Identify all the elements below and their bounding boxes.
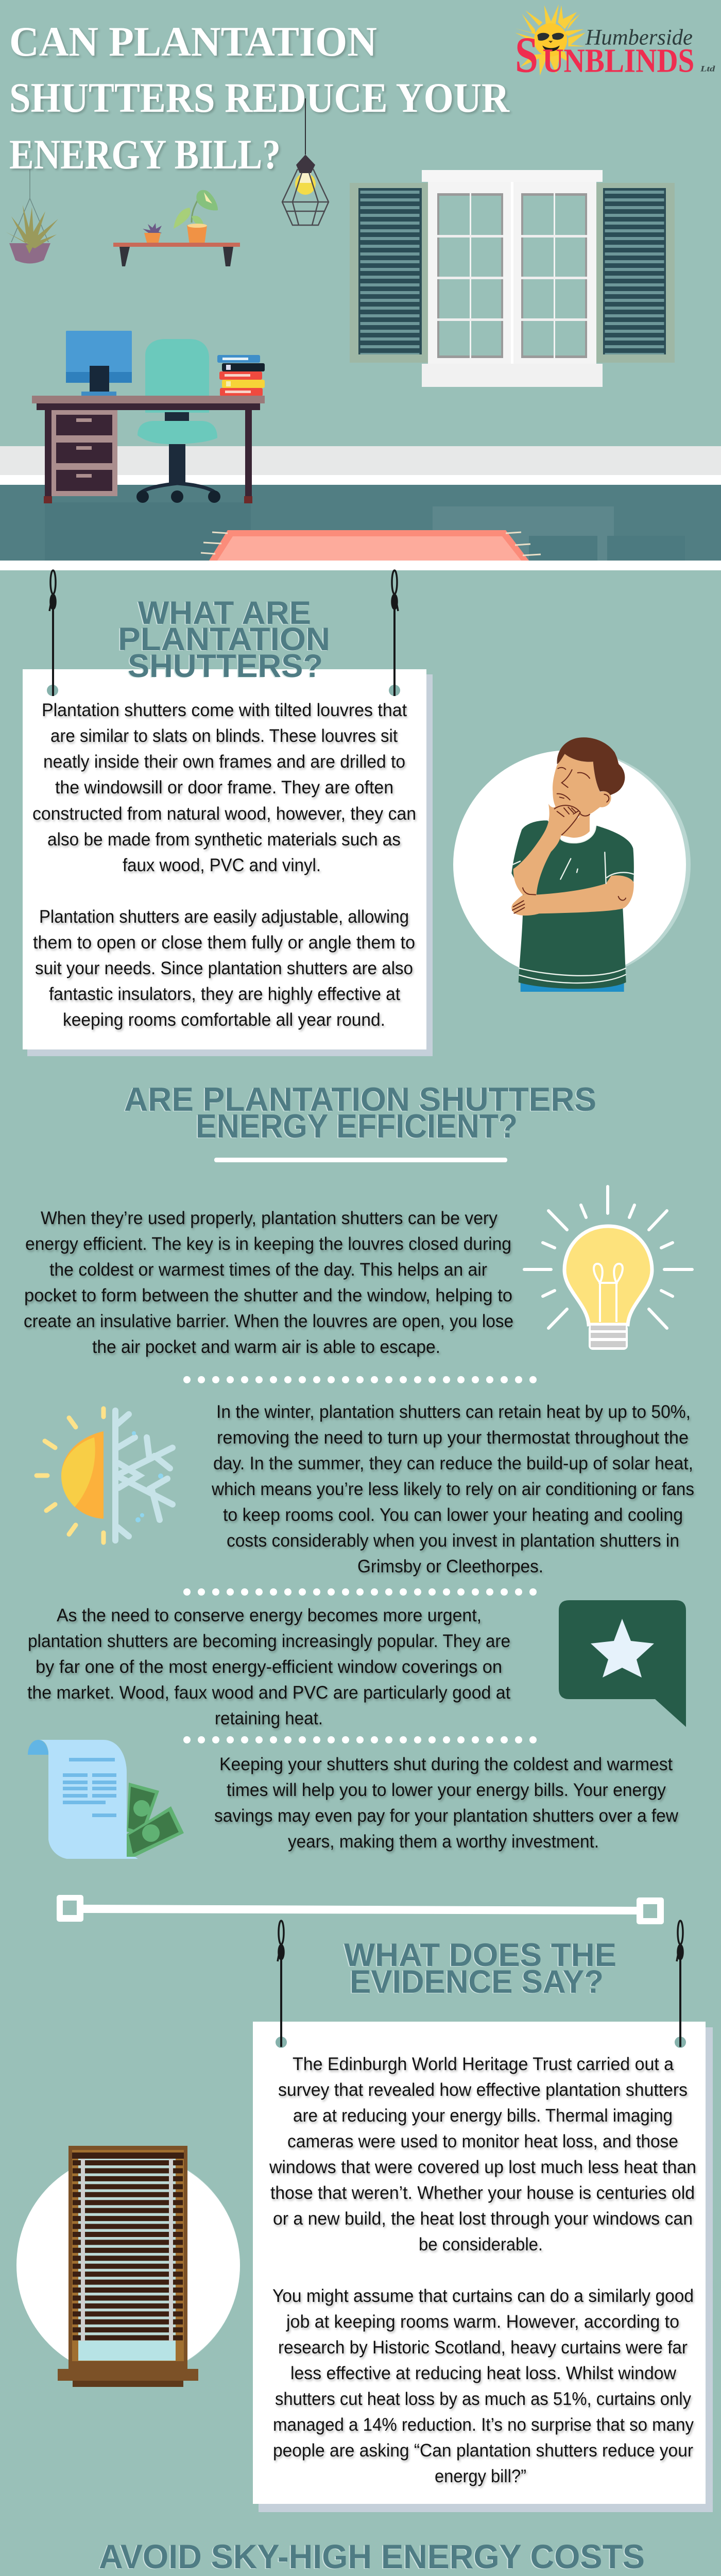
text: what are plantation shutters: Plantation shutters come with tilted louvres that — [42, 700, 407, 720]
divider dots — [187, 1736, 534, 1743]
icon: light bulb — [524, 1187, 692, 1350]
text: energy efficient intro: When they’re used properly, plantation shutters can be very — [41, 1208, 497, 1228]
text: what are plantation shutters: constructed from natural wood, however, they can — [32, 804, 416, 824]
text: what are plantation shutters: them to open or close them fully or angle them to — [33, 933, 415, 953]
logo: Humberside Sunblinds: Humberside — [585, 25, 693, 50]
rope right — [392, 570, 398, 696]
text: popularity of shutters: retaining heat. — [215, 1708, 323, 1728]
text: energy efficient intro: the air pocket and warm air is able to escape. — [92, 1337, 440, 1357]
text: what are plantation shutters: keeping rooms comfortable all year round. — [63, 1010, 385, 1030]
text: popularity of shutters — [27, 1605, 510, 1728]
text: evidence: You might assume that curtains can do a similarly good — [272, 2286, 694, 2306]
text: what are plantation shutters: suit your needs. Since plantation shutters are also — [35, 958, 413, 978]
heading: what are plantation shutters: SHUTTERS? — [128, 648, 323, 684]
rug — [201, 530, 541, 561]
text: energy efficient intro: the coldest or warmest times of the day. This helps an air — [49, 1260, 487, 1280]
heading: are plantation shutters energy efficient: ARE PLANTATION SHUTTERS — [124, 1080, 596, 1118]
text: evidence: cameras were used to monitor heat loss, and those — [287, 2131, 678, 2151]
text: winter and summer savings: day. In the summer, they can reduce the build-up of solar heat, — [213, 1453, 693, 1473]
text: popularity of shutters: the market. Wood, faux wood and PVC are particularly good at — [27, 1683, 510, 1703]
heading: avoid sky-high energy costs: AVOID SKY-HIGH ENERGY COSTS — [99, 2537, 645, 2575]
text: evidence: The Edinburgh World Heritage Trust carried out a — [293, 2054, 674, 2074]
text: winter and summer savings: In the winter, plantation shutters can retain heat by up to 50%, — [216, 1402, 691, 1422]
text: what are plantation shutters: also be made from synthetic materials such as — [47, 829, 401, 850]
icon: hanging plant — [6, 170, 58, 264]
divider dots — [187, 1588, 534, 1596]
text: what are plantation shutters: fantastic insulators, they are highly effective at — [49, 984, 400, 1004]
text: what are plantation shutters — [32, 700, 416, 1030]
text: lower your bills: times will help you to lower your energy bills. Your energy — [227, 1780, 666, 1800]
text: what are plantation shutters: Plantation shutters are easily adjustable, allowing — [39, 907, 409, 927]
title: ENERGY BILL? — [9, 131, 281, 178]
panel: what does the evidence say — [253, 1921, 713, 2512]
text: energy efficient intro: energy efficient. The key is in keeping the louvres closed during — [25, 1234, 511, 1254]
text: lower your bills: Keeping your shutters shut during the coldest and warmest — [219, 1754, 673, 1774]
text: evidence — [269, 2054, 696, 2486]
heading: what are plantation shutters: PLANTATION — [118, 621, 330, 657]
text: winter and summer savings: Grimsby or Cleethorpes. — [357, 1556, 543, 1577]
title: SHUTTERS REDUCE YOUR — [9, 74, 510, 121]
hero room scene — [0, 446, 721, 570]
logo: Humberside Sunblinds: Ltd — [700, 65, 716, 74]
heading: are plantation shutters energy efficient — [124, 1080, 596, 1145]
text: evidence: are at reducing your energy bills. Thermal imaging — [293, 2106, 673, 2126]
text: lower your bills — [214, 1754, 679, 1852]
text: evidence: or a new build, the heat lost through your windows can — [273, 2209, 693, 2229]
icon: thinking man — [453, 737, 691, 992]
text: energy efficient intro: create an insulative barrier. When the louvres are open, you lose — [24, 1311, 513, 1331]
text: popularity of shutters: As the need to conserve energy becomes more urgent, — [57, 1605, 482, 1625]
icon: shuttered window — [350, 170, 675, 387]
text: winter and summer savings: to keep rooms cool. You can lower your heating and cooling — [223, 1505, 683, 1525]
text: winter and summer savings: removing the need to turn up your thermostat throughout the — [217, 1428, 689, 1448]
books — [217, 355, 265, 396]
heading: what are plantation shutters: WHAT ARE — [138, 595, 311, 631]
panel: what are plantation shutters — [23, 570, 433, 1056]
rope left — [49, 570, 56, 696]
text: evidence: job at keeping rooms warm. However, according to — [286, 2312, 679, 2332]
text: winter and summer savings: which means you’re less likely to rely on air conditioning or fans — [211, 1479, 694, 1499]
icon: half sun half snowflake — [37, 1409, 173, 1543]
title — [9, 18, 510, 178]
logo: Humberside Sunblinds — [515, 4, 716, 83]
heading: what does the evidence say: EVIDENCE SAY? — [350, 1964, 604, 2000]
text: what are plantation shutters: are similar to slats on blinds. These louvres sit — [50, 726, 398, 746]
icon: desk with monitor, chair and books — [32, 331, 265, 503]
text: what are plantation shutters: faux wood, PVC and vinyl. — [123, 855, 321, 875]
heading: what are plantation shutters — [118, 595, 330, 684]
text: winter and summer savings — [211, 1402, 694, 1577]
divider dots — [187, 1376, 534, 1383]
text: what are plantation shutters: neatly inside their own frames and are drilled to — [43, 752, 405, 772]
text: evidence: people are asking “Can plantation shutters reduce your — [273, 2441, 693, 2461]
text: lower your bills: years, making them a worthy investment. — [288, 1832, 599, 1852]
text: evidence: survey that revealed how effective plantation shutters — [278, 2080, 688, 2100]
icon: shelf with potted plants — [113, 190, 240, 266]
icon: pendant lamp — [282, 98, 329, 225]
text: evidence: be considerable. — [419, 2234, 543, 2255]
logo: Humberside Sunblinds: UNBLINDS — [542, 42, 694, 79]
text: evidence: less effective at reducing heat loss. Whilst window — [290, 2363, 677, 2383]
icon: bill and banknotes — [28, 1740, 184, 1859]
text: popularity of shutters: plantation shutters are becoming increasingly popular. They are — [28, 1631, 510, 1651]
text: evidence: research by Historic Scotland, heavy curtains were far — [278, 2337, 688, 2358]
icon: window with wooden blinds — [16, 2146, 240, 2387]
text: evidence: managed a 14% reduction. It’s no surprise that so many — [273, 2415, 694, 2435]
text: energy efficient intro — [24, 1208, 513, 1357]
text: evidence: energy bill?” — [435, 2466, 526, 2486]
logo: Humberside Sunblinds: S — [515, 27, 538, 83]
rope left — [278, 1921, 284, 2047]
rope right — [677, 1921, 683, 2047]
title: CAN PLANTATION — [9, 18, 377, 65]
text: evidence: shutters cut heat loss by as much as 51%, curtains only — [275, 2389, 691, 2409]
icon: speech bubble with star — [559, 1600, 686, 1727]
text: popularity of shutters: by far one of the most energy-efficient window coverings on — [36, 1657, 502, 1677]
heading: what does the evidence say — [344, 1937, 616, 2000]
text: energy efficient intro: pocket to form between the shutter and the window, helping to — [24, 1285, 512, 1306]
heading: are plantation shutters energy efficient: ENERGY EFFICIENT? — [196, 1107, 518, 1145]
text: evidence: those that weren’t. Whether your house is centuries old — [270, 2183, 695, 2203]
text: evidence: windows that were covered up lost much less heat than — [269, 2157, 696, 2177]
heading: what does the evidence say: WHAT DOES THE — [344, 1937, 616, 1973]
text: what are plantation shutters: the windowsill or door frame. They are often — [55, 777, 393, 798]
text: lower your bills: savings may even pay for your plantation shutters over a few — [214, 1806, 679, 1826]
curtain rail divider — [57, 1895, 664, 1924]
text: winter and summer savings: costs considerably when you invest in plantation shutters in — [227, 1531, 679, 1551]
